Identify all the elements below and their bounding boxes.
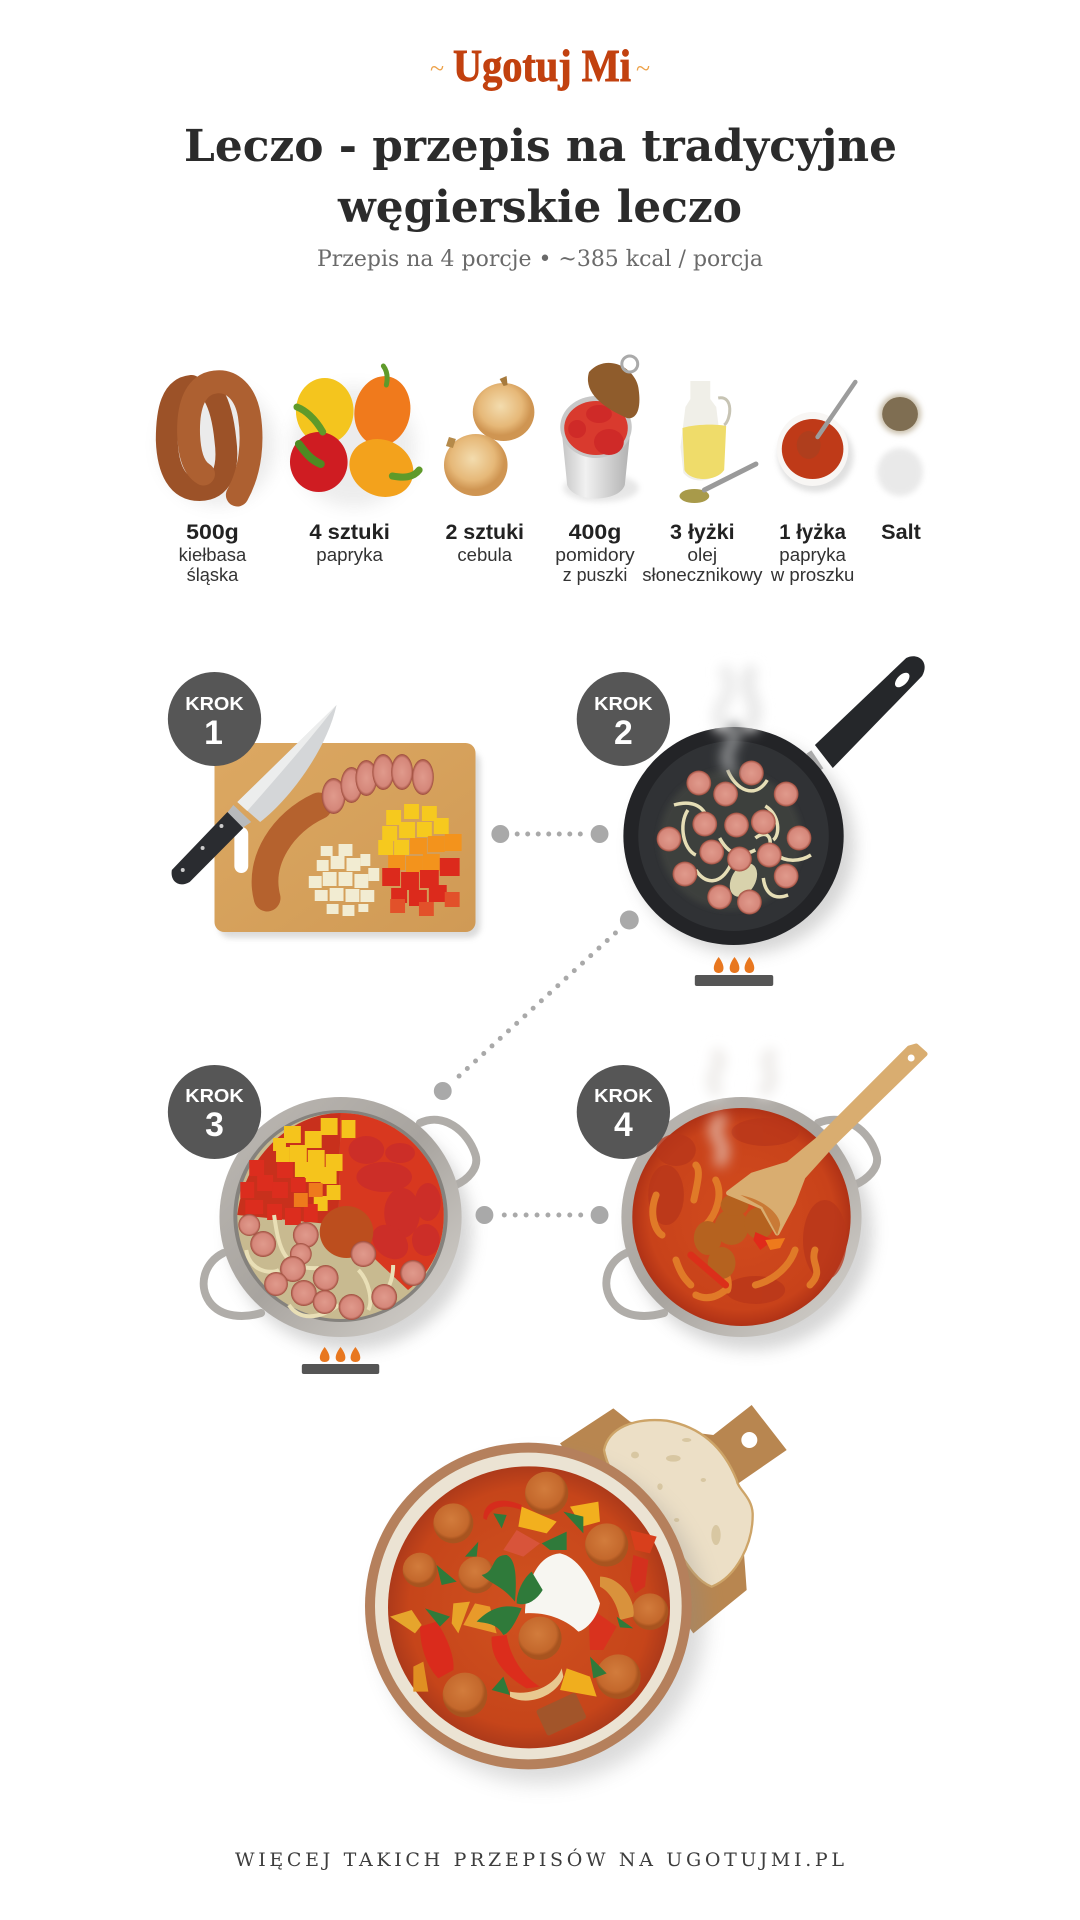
- logo: Ugotuj Mi: Ugotuj Mi: [453, 40, 631, 91]
- panel: finished dish: [365, 1405, 787, 1783]
- icon: wooden spoon: [729, 1046, 925, 1235]
- title: [184, 121, 897, 233]
- icon: burner: [302, 1347, 379, 1374]
- icon: knife: [172, 705, 337, 884]
- arrow: step 3 to step 4: [476, 1206, 608, 1224]
- arrow: step 1 to step 2: [491, 825, 608, 843]
- sour cream: [525, 1553, 600, 1632]
- step badge: KROK 3: [168, 1065, 261, 1159]
- icon: sausage ring: [160, 382, 275, 505]
- step badge: KROK 1: [168, 672, 261, 766]
- ingredient labels: słonecznikowy: [642, 565, 762, 585]
- arrow: step 2 to step 3: [434, 910, 639, 1100]
- ingredient labels: 2 sztuki: [445, 521, 524, 544]
- sausage slices in pan: [657, 760, 811, 914]
- ingredient labels: 3 łyżki: [670, 521, 735, 544]
- icon: cutting board: [215, 743, 480, 938]
- icon: canned tomatoes: [560, 356, 639, 502]
- icon: pepper and salt piles: [877, 394, 923, 496]
- red pepper cubes: [240, 1160, 323, 1225]
- icon: pot with simmering stew: [606, 1097, 877, 1350]
- parsley: [425, 1512, 633, 1695]
- ingredient labels: papryka: [316, 545, 383, 565]
- step badge: KROK 2: KROK: [594, 694, 653, 714]
- onion rings and sausage slices: [238, 1214, 426, 1320]
- yellow pepper cubes: [273, 1118, 355, 1211]
- panel: step 3: [168, 1065, 476, 1374]
- step badge: KROK 4: KROK: [594, 1086, 653, 1106]
- icon: oil bottle and spoon: [679, 381, 756, 503]
- icon: pot with raw ingredients: [204, 1097, 476, 1350]
- logo: Ugotuj Mi: ~: [430, 54, 444, 83]
- step badge: KROK 2: 2: [614, 714, 633, 752]
- ingredient labels: [179, 521, 921, 585]
- icon: chopped peppers: [378, 804, 462, 916]
- icon: onions: [444, 376, 534, 496]
- icon: bell peppers: [290, 366, 423, 507]
- step badge: KROK 1: 1: [204, 714, 223, 752]
- onion arcs: [674, 770, 811, 897]
- ingredient labels: śląska: [187, 565, 238, 585]
- ingredient labels: 400g: [569, 521, 621, 544]
- icon: paprika bowl: [777, 382, 855, 492]
- ingredient labels: z puszki: [563, 565, 627, 585]
- step badge: KROK 3: 3: [205, 1106, 224, 1144]
- stew pieces: [648, 1118, 847, 1304]
- icon: steam: [719, 672, 755, 768]
- icon: bowl: [365, 1443, 705, 1783]
- paprika powder: [320, 1206, 373, 1258]
- ingredient labels: olej: [687, 545, 717, 565]
- icon: serving board: [560, 1405, 787, 1633]
- title: węgierskie leczo: [337, 182, 742, 233]
- title: Leczo - przepis na tradycyjne: [184, 121, 897, 172]
- footer: WIĘCEJ TAKICH PRZEPISÓW NA UGOTUJMI.PL: [235, 1848, 844, 1871]
- panel: step 2: [577, 656, 925, 986]
- stew peppers: [390, 1501, 657, 1701]
- ingredient labels: kiełbasa: [179, 545, 246, 565]
- panel: step 4: [577, 1046, 925, 1350]
- ingredient labels: w proszku: [770, 565, 854, 585]
- ingredient labels: cebula: [457, 545, 512, 565]
- ingredient labels: Salt: [881, 521, 921, 544]
- icon: frying pan: [623, 656, 925, 954]
- step badge: KROK 4: 4: [614, 1106, 633, 1144]
- icon: chopped onion: [309, 844, 379, 916]
- ingredient labels: 500g: [186, 521, 239, 544]
- icon: steam: [713, 1055, 771, 1160]
- logo: Ugotuj Mi: ~: [636, 54, 650, 83]
- stew sausages: [403, 1472, 668, 1736]
- ingredient labels: papryka: [779, 545, 846, 565]
- panel: step 1: [168, 672, 480, 938]
- ingredient labels: pomidory: [555, 545, 635, 565]
- step badge: KROK 1: KROK: [185, 694, 244, 714]
- ingredient labels: 4 sztuki: [309, 521, 390, 544]
- icon: burner: [695, 957, 773, 986]
- step badge: KROK 2: [577, 672, 670, 766]
- step badge: KROK 4: [577, 1065, 670, 1159]
- tomatoes: [348, 1136, 441, 1266]
- panel: ingredients: [160, 356, 923, 585]
- ingredient labels: 1 łyżka: [779, 521, 846, 544]
- step badge: KROK 3: KROK: [185, 1086, 244, 1106]
- subtitle: Przepis na 4 porcje • ~385 kcal / porcja: [317, 247, 763, 272]
- icon: sausage and slices: [265, 754, 434, 898]
- icon: bread slice: [604, 1420, 753, 1587]
